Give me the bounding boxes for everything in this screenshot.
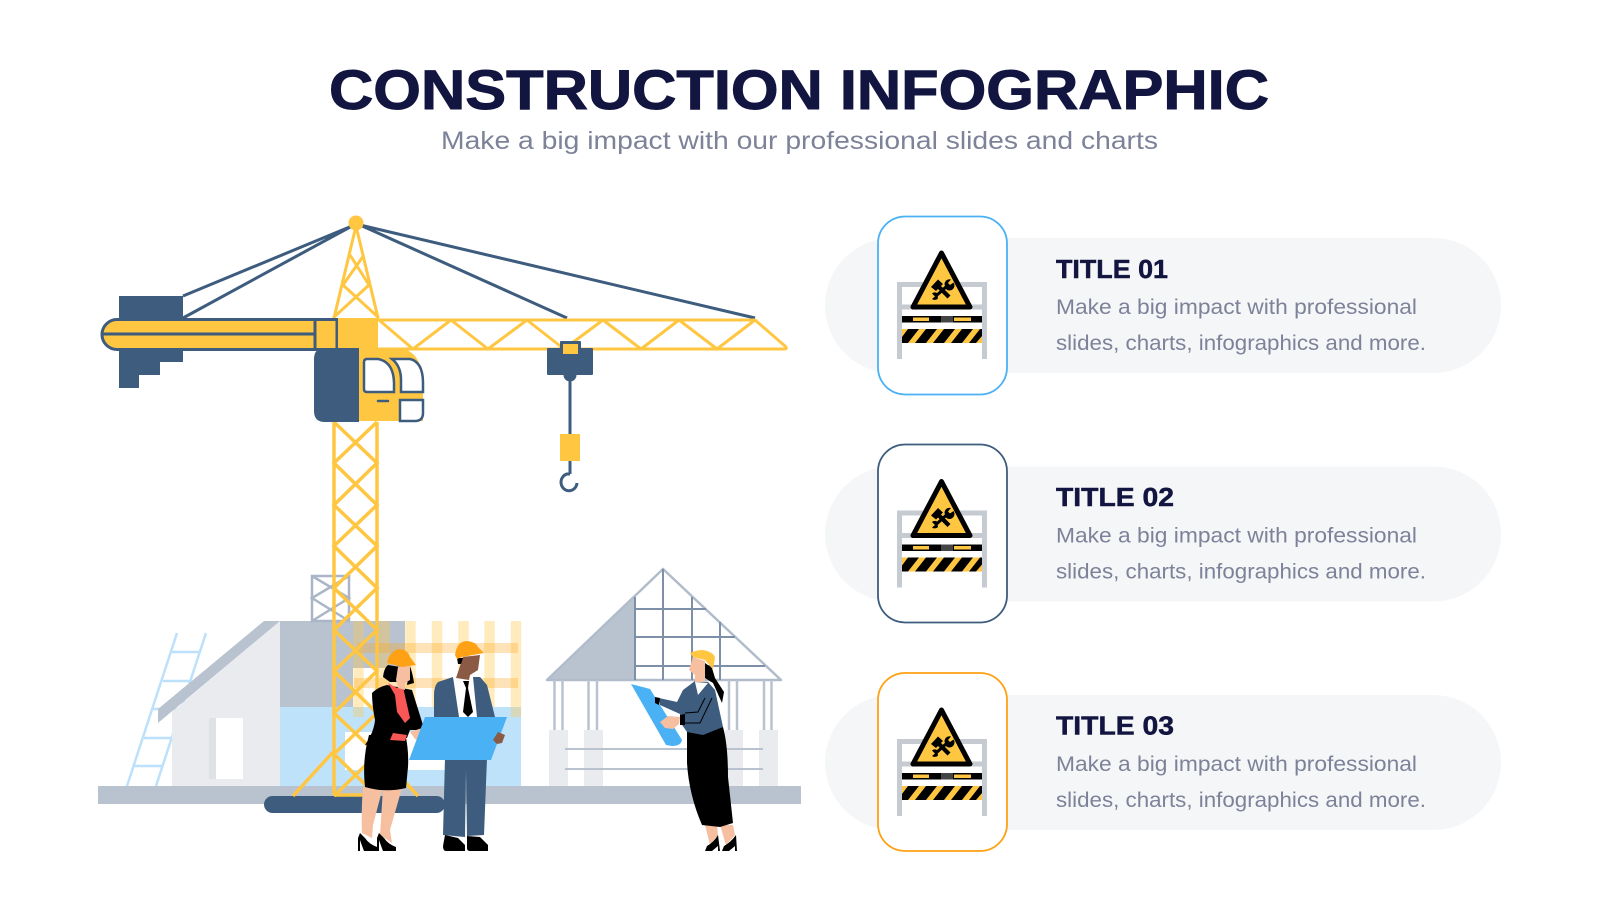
- pill background: [825, 238, 1501, 373]
- heading: TITLE 01: [1056, 254, 1168, 284]
- body text: slides, charts, infographics and more.: [1056, 560, 1426, 584]
- left house under construction: [127, 576, 521, 786]
- title: CONSTRUCTION INFOGRAPHIC: [329, 58, 1269, 121]
- counterweights: [119, 296, 183, 388]
- body text: [1056, 753, 1426, 812]
- body text: slides, charts, infographics and more.: [1056, 789, 1426, 812]
- crane top lattice: [333, 226, 379, 318]
- pill background: [825, 695, 1501, 830]
- body text: [1056, 296, 1426, 355]
- worker: man in blue suit: [409, 641, 507, 851]
- panel: title 02: [825, 444, 1501, 622]
- pill background: [825, 466, 1501, 602]
- panel: title 03: [825, 673, 1501, 851]
- body text: [1056, 524, 1426, 584]
- illustration: construction site: [98, 216, 801, 851]
- panel: title 01: [825, 216, 1501, 394]
- ground: [98, 786, 801, 804]
- icon card: barrier sign: [878, 673, 1007, 851]
- rolled blueprint: [631, 684, 682, 746]
- heading: TITLE 03: [1056, 710, 1174, 740]
- crane jib truss: [378, 320, 786, 349]
- body text: Make a big impact with professional: [1056, 296, 1417, 319]
- worker: woman with rolled plan: [631, 650, 737, 851]
- crane cables: [183, 225, 755, 318]
- icon card: barrier sign: [878, 444, 1007, 622]
- icon card: barrier sign: [878, 216, 1007, 394]
- counter jib: [102, 320, 337, 350]
- tower crane: [102, 216, 786, 813]
- worker: woman in black suit: [358, 649, 427, 851]
- body text: Make a big impact with professional: [1056, 524, 1417, 548]
- crane trolley and hook: [547, 341, 593, 491]
- body text: Make a big impact with professional: [1056, 753, 1417, 776]
- heading: TITLE 02: [1056, 482, 1174, 512]
- crane cabin: [355, 348, 423, 421]
- blueprint held by man and woman: [409, 717, 507, 760]
- body text: slides, charts, infographics and more.: [1056, 332, 1426, 355]
- crane mast: [293, 422, 418, 796]
- right house frame: [547, 569, 781, 786]
- subtitle: Make a big impact with our professional slides and charts: [441, 127, 1158, 155]
